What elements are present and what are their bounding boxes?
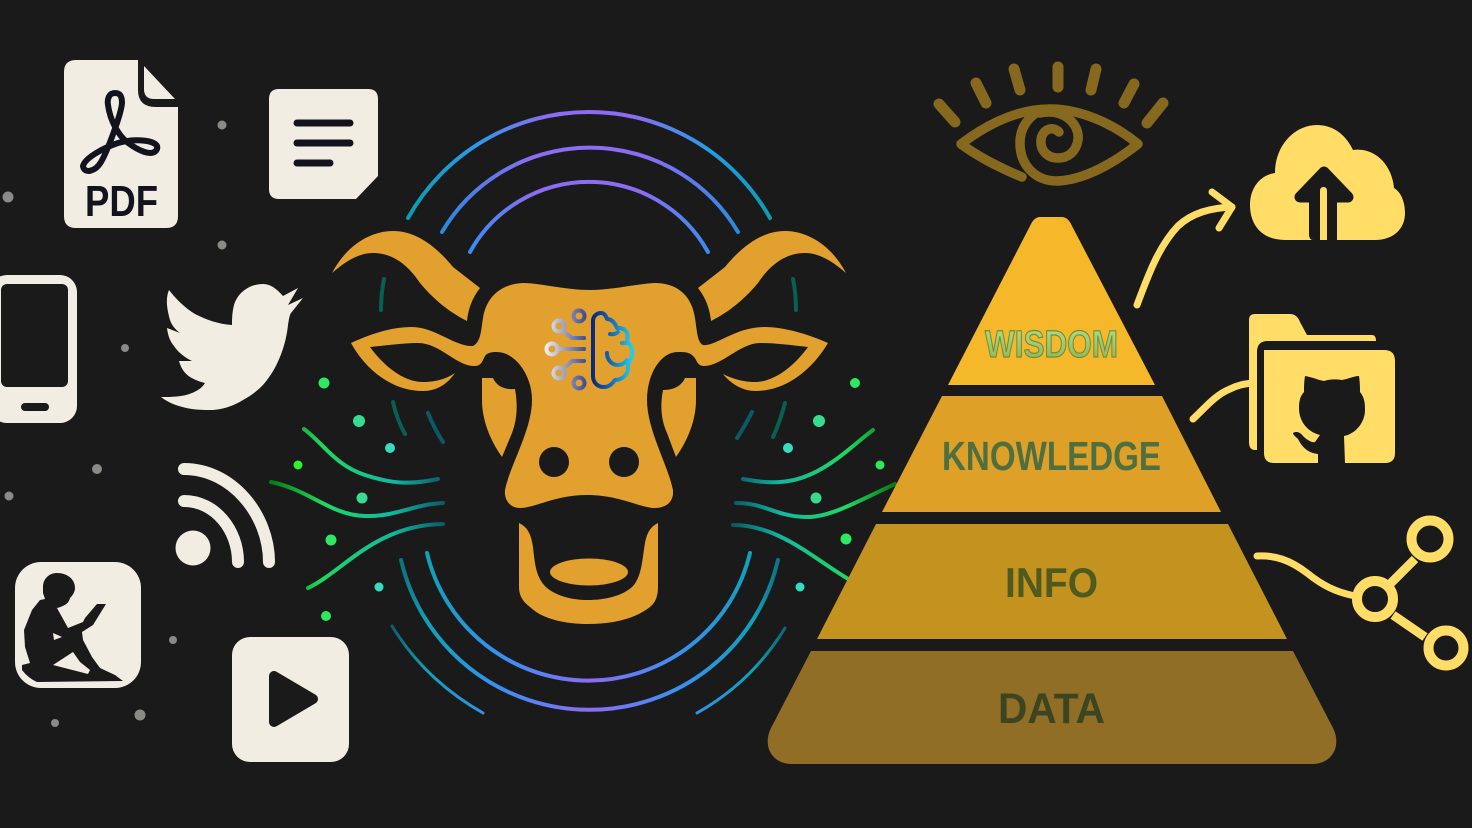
icon: PDF document	[64, 60, 178, 228]
bull left horn	[332, 231, 480, 321]
panel: green particles	[294, 378, 884, 621]
panel: radiating arcs	[381, 112, 796, 713]
panel: scattered gray dots	[2, 120, 226, 727]
bull right cheek	[661, 378, 696, 457]
arrow: wisdom to cloud	[1137, 192, 1232, 305]
icon: AI brain circuit	[546, 310, 632, 388]
panel: green signal waves	[271, 429, 895, 588]
icon: PDF document: PDF	[85, 177, 158, 226]
pyramid level: knowledge	[882, 396, 1221, 512]
pyramid level: wisdom: WISDOM	[985, 324, 1118, 366]
bull nostrils	[539, 447, 639, 477]
icon: play button	[232, 637, 349, 762]
bull right horn	[698, 231, 846, 321]
bull jaw	[519, 523, 658, 624]
icon: twitter bird	[161, 284, 303, 410]
pyramid level: info	[817, 524, 1287, 639]
chart: knowledge pyramid	[768, 217, 1336, 764]
icon: note document	[269, 89, 378, 199]
icon: wisdom eye	[939, 67, 1163, 181]
panel: bull head	[332, 231, 846, 624]
pyramid level: info: INFO	[1005, 559, 1098, 606]
bull tongue	[550, 558, 628, 586]
icon: RSS feed	[176, 469, 269, 566]
pyramid level: data: DATA	[998, 685, 1105, 733]
icon: cloud upload	[1250, 125, 1405, 240]
icon: share nodes with arrow	[1257, 520, 1464, 666]
icon: reader silhouette	[15, 562, 141, 688]
pyramid level: data	[768, 651, 1336, 764]
bull face and ears	[351, 283, 828, 508]
icon: GitHub folder	[1249, 314, 1395, 463]
pyramid level: wisdom	[948, 217, 1155, 385]
pyramid level: knowledge: KNOWLEDGE	[942, 433, 1161, 479]
arrow: knowledge to folder	[1193, 383, 1252, 419]
icon: smartphone	[0, 275, 77, 423]
bull left cheek	[482, 378, 517, 457]
